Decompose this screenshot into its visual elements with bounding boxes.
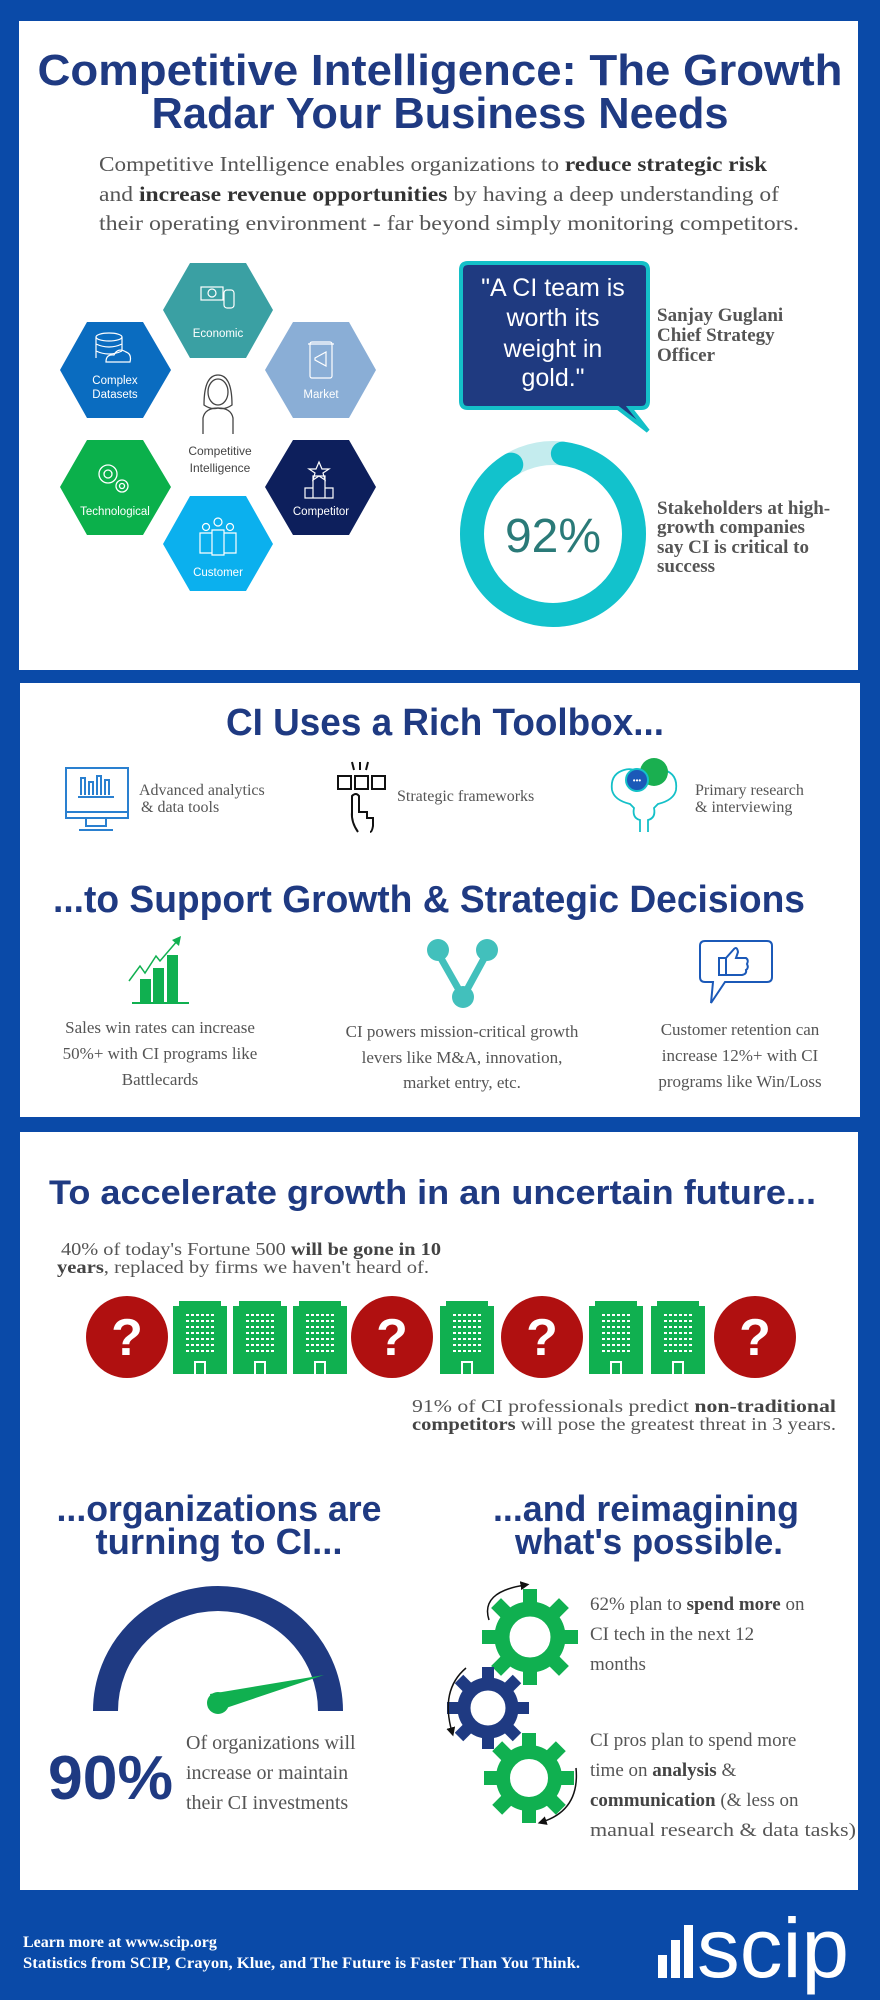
text: research: & interviewing [695,799,792,816]
icon: growth chart [129,936,189,1004]
title [38,46,842,138]
icon: network V [427,939,498,1008]
hex: complex datasets [60,322,171,418]
attribution: Officer [657,345,716,366]
stat text [657,498,830,577]
text: analysis [590,1730,856,1841]
heading organizations: ...organizations are [56,1488,382,1529]
text: investments [186,1732,356,1814]
heading reimagining: ...and reimagining [493,1488,799,1529]
heading reimagining [493,1488,799,1562]
icon row: buildings and question marks: ? [526,1309,558,1367]
stat text: say CI is critical to [657,537,809,558]
hex: technological [60,440,171,535]
icon row: buildings and question marks: ? [376,1309,408,1367]
text: retention: programs like Win/Loss [658,1072,822,1091]
icon: monitor [66,768,128,830]
intro text: their operating environment - far beyond simply monitoring competitors. [99,211,799,235]
quote bubble: weight in [503,335,602,363]
hex: competitor: Competitor [293,506,349,518]
heading organizations: turning to CI... [96,1521,342,1562]
text: fortune 500 [57,1239,441,1277]
heading toolbox: CI Uses a Rich Toolbox... [226,702,664,744]
text: non-traditional: 91% of CI professionals predict non-traditional [412,1396,836,1416]
text: growth levers: market entry, etc. [403,1073,521,1092]
text: investments: increase or maintain [186,1762,348,1784]
heading support: ...to Support Growth & Strategic Decisions [53,879,805,921]
hex: technological: Technological [80,506,150,518]
text: research [695,782,804,816]
text: sales [63,1018,257,1089]
text: investments: Of organizations will [186,1732,356,1754]
logo: scip: scip [697,1901,849,1995]
hex: competitor [265,440,376,535]
attribution: Chief Strategy [657,325,775,346]
icon: hand frameworks [338,762,385,832]
text: retention: increase 12%+ with CI [662,1046,819,1065]
label: competitive intelligence: Intelligence [190,461,251,475]
hex: market: Market [303,389,339,401]
hexagon diagram [60,263,376,591]
heading reimagining: what's possible. [514,1521,783,1562]
text: retention: Customer retention can [661,1020,820,1039]
panel: future [20,1132,858,1890]
hex: economic: Economic [193,328,243,340]
quote bubble: worth its [505,304,600,332]
text: fortune 500: 40% of today's Fortune 500 will be gone in 10 [61,1239,441,1259]
text: analytics: Advanced analytics [139,782,265,799]
title: Competitive Intelligence: The Growth [38,46,842,95]
icon row: buildings and question marks: ? [739,1309,771,1367]
hex: customer [163,496,273,591]
text: sales: Sales win rates can increase [65,1018,255,1037]
text: analysis: manual research & data tasks) [590,1820,856,1841]
heading organizations [56,1488,382,1562]
text: frameworks: Strategic frameworks [397,788,534,805]
label: competitive intelligence: Competitive [188,444,252,458]
intro text: and increase revenue opportunities by having a deep understanding of [99,182,779,206]
label: competitive intelligence [188,444,252,475]
text: spend more: CI tech in the next 12 [590,1624,754,1645]
text: analysis: time on analysis & [590,1760,736,1781]
text: analysis: communication (& less on [590,1790,799,1811]
icon: gears [447,1585,578,1823]
text: fortune 500: years , replaced by firms we haven't heard of. [57,1257,429,1277]
icon: person [203,375,233,434]
attribution: Sanjay Guglani [657,305,783,326]
text columns [63,1018,822,1092]
hex: complex datasets: Complex [92,375,138,387]
hex: complex datasets: Datasets [92,389,138,401]
hex: customer: Customer [193,567,243,579]
text: non-traditional: competitors will pose the greatest threat in 3 years. [412,1414,836,1434]
icon: two heads [612,758,676,832]
text: analytics: & data tools [141,799,219,816]
gauge [106,1598,330,1714]
stat text: Stakeholders at high- [657,498,830,519]
title: Radar Your Business Needs [152,89,728,138]
text: retention [658,1020,822,1091]
text: sales: Battlecards [122,1070,198,1089]
text: spend more [590,1594,805,1675]
hex: economic [163,263,273,358]
footer text: Statistics from SCIP, Crayon, Klue, and The Future is Faster Than You Think. [23,1955,580,1972]
text: sales: 50%+ with CI programs like [63,1044,257,1063]
stat text: success [657,556,715,577]
text: analysis: CI pros plan to spend more [590,1730,796,1751]
stat text: growth companies [657,517,805,538]
heading future: To accelerate growth in an uncertain future... [49,1174,816,1212]
panel: toolbox [20,683,860,1117]
text: growth levers: CI powers mission-critical growth [346,1022,579,1041]
text: growth levers [346,1022,579,1092]
hex: market [265,322,376,418]
text: spend more: 62% plan to spend more on [590,1594,805,1615]
text: research: Primary research [695,782,804,799]
text: non-traditional [412,1396,836,1434]
donut chart 92%: 92% [505,510,601,563]
stat 90%: 90% [48,1744,173,1813]
icon row: buildings and question marks [86,1296,796,1378]
text: investments: their CI investments [186,1792,348,1814]
panel: intro [19,21,858,670]
quote bubble: gold." [521,364,585,392]
intro text [99,152,799,235]
text: analytics [139,782,265,816]
icon: thumbs up chat [700,941,772,1003]
quote bubble [461,263,648,431]
donut chart 92% [463,444,643,624]
footer text: Learn more at www.scip.org [23,1934,217,1951]
text: spend more: months [590,1654,646,1675]
icon row: buildings and question marks: ? [111,1309,143,1367]
attribution [657,305,783,366]
quote bubble: "A CI team is [481,274,625,302]
footer text [23,1934,580,1972]
icon: two heads: ••• [633,776,641,785]
intro text: Competitive Intelligence enables organizations to reduce strategic risk [99,152,767,176]
text: growth levers: levers like M&A, innovation, [362,1048,562,1067]
